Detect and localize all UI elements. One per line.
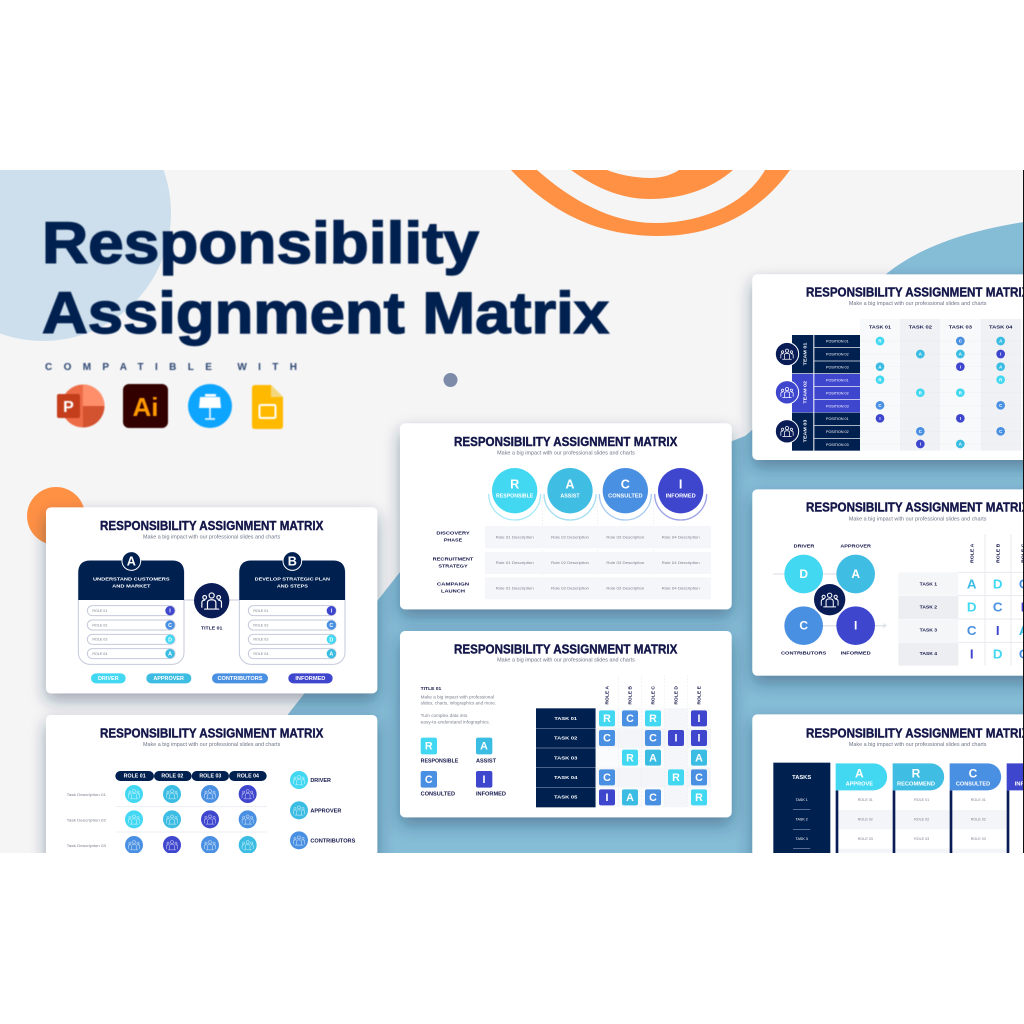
assignment dots: C (999, 403, 1002, 408)
assignment grid: C (626, 713, 634, 725)
panel subtitle: Make a big impact with our professional slides and charts (497, 658, 635, 664)
assignment grid: I (698, 713, 701, 725)
panel subtitle: Make a big impact with our professional slides and charts (497, 450, 635, 456)
description text: slides, charts, infographics and more. (421, 701, 496, 706)
phase rows: PHASE (444, 538, 463, 544)
RACI circles: R (510, 478, 519, 492)
DACI circles: C (799, 619, 808, 633)
phase rows: DISCOVERY (436, 531, 470, 537)
panel subtitle: Make a big impact with our professional slides and charts (143, 742, 281, 748)
RACI circles: I (679, 478, 682, 492)
assignment dots: I (920, 442, 921, 447)
card B: ROLE 03 (253, 638, 268, 642)
card B: ROLE 01 (253, 609, 268, 613)
card A: ROLE 04 (92, 652, 107, 656)
card B: D (329, 637, 333, 643)
DACI circles: INFORMED (841, 650, 871, 656)
icon: Illustrator (123, 384, 168, 428)
connector lines (184, 598, 239, 601)
label: title 01: TITLE 01 (201, 626, 223, 632)
assignment grid: R (672, 772, 680, 784)
task column: TASK 05 (554, 795, 578, 801)
RACI legend: R (425, 741, 433, 753)
icon: PowerPoint: P (63, 399, 74, 416)
phase rows: Role 04 Description (662, 534, 700, 539)
phase rows: Role 01 Description (496, 560, 534, 565)
panel title: RESPONSIBILITY ASSIGNMENT MATRIX (454, 641, 678, 656)
tasks column: TASK 1 (796, 798, 808, 802)
card A: ROLE 03 (92, 638, 107, 642)
table bands: ROLE 02 (971, 818, 986, 822)
team blocks (792, 335, 813, 451)
card A: UNDERSTAND CUSTOMERS (93, 576, 170, 582)
position rows: POSITION 03 (826, 443, 849, 447)
team blocks: TEAM 03 (802, 419, 808, 442)
icon: Google Slides (252, 385, 283, 429)
task rows: TASK 3 (920, 628, 937, 634)
white band top (0, 0, 1024, 170)
table bands (837, 790, 1008, 868)
letter matrix: ROLE B (996, 544, 1001, 563)
description text: TITLE 01 (421, 686, 442, 692)
role icon circles (125, 785, 257, 854)
DACI circles: DRIVER (794, 544, 815, 550)
letter matrix: A (967, 577, 977, 592)
letter matrix: C (993, 600, 1003, 615)
assignment dots: I (960, 416, 961, 421)
legend: APPROVER (310, 808, 341, 814)
RACI circles: CONSULTED (608, 494, 643, 500)
DACI circles (773, 544, 886, 656)
RACI legend: RESPONSIBLE (421, 758, 459, 764)
decorative blue blob (190, 222, 1024, 860)
card A: A (168, 652, 172, 658)
card B: DEVELOP STRATEGIC PLAN (255, 576, 330, 582)
task column: TASK 02 (554, 736, 578, 742)
letter matrix: D (993, 646, 1003, 661)
description text: Turn complex data into (421, 713, 468, 718)
task rows (898, 572, 958, 666)
RACI circles: INFORMED (666, 494, 696, 500)
phase rows (433, 526, 711, 599)
RACI legend: ASSIST (476, 758, 497, 764)
phase rows: CAMPAIGN (437, 582, 470, 588)
panel title: RESPONSIBILITY ASSIGNMENT MATRIX (100, 725, 324, 740)
assignment dots: I (1000, 352, 1001, 357)
assignment grid: C (695, 772, 703, 784)
RACI legend (421, 738, 506, 797)
RACI legend: INFORMED (476, 791, 506, 797)
card A (78, 552, 184, 664)
phase rows: Role 01 Description (496, 534, 534, 539)
task descriptions: Task Description 03 (67, 843, 107, 848)
phase rows: Role 01 Description (496, 586, 534, 591)
role column labels: ROLE B (628, 686, 633, 705)
DACI circles: APPROVER (840, 544, 871, 550)
assignment dots: C (919, 429, 922, 434)
table bands: ROLE 03 (914, 837, 929, 841)
assignment grid (596, 675, 711, 807)
description text: Make a big impact with professional (421, 694, 494, 699)
card B: I (331, 609, 333, 615)
tasks column: TASKS (792, 775, 812, 781)
table bands: ROLE 03 (971, 837, 986, 841)
task columns: TASK 04 (989, 324, 1013, 330)
team icons (775, 342, 799, 443)
main title: Responsibility (42, 211, 479, 276)
card A: AND MARKET (112, 583, 150, 589)
card A: ROLE 01 (92, 609, 107, 613)
task column: TASK 03 (554, 755, 578, 761)
panel subtitle: Make a big impact with our professional slides and charts (143, 534, 281, 540)
table bands: ROLE 01 (858, 798, 873, 802)
position rows: POSITION 03 (826, 404, 849, 408)
assignment dots: I (960, 364, 961, 369)
team blocks: TEAM 02 (802, 381, 808, 404)
card A: C (168, 623, 172, 629)
phase rows: LAUNCH (441, 589, 465, 595)
table bands: ROLE 01 (971, 798, 986, 802)
RACI circles: A (565, 478, 575, 492)
letter matrix: I (970, 646, 974, 661)
role column labels (605, 685, 702, 705)
phase rows: RECRUITMENT (433, 556, 473, 562)
card B: C (329, 623, 333, 629)
card B: A (329, 652, 333, 658)
letter matrix: D (993, 577, 1003, 592)
DACI circles: I (854, 619, 857, 633)
panel: task role table (752, 714, 1024, 901)
panel: DACI diagram (752, 489, 1024, 676)
panel: RACI phases (400, 423, 732, 609)
assignment dots: A (959, 442, 963, 447)
role column labels: ROLE E (697, 686, 702, 705)
task column: TASK 01 (554, 716, 577, 722)
DACI circles: A (851, 567, 860, 581)
assignment dots: R (919, 390, 923, 395)
assignment grid: R (626, 752, 634, 764)
team blocks: TEAM 01 (802, 342, 808, 365)
panel: two role cards (46, 507, 377, 693)
card B: ROLE 02 (253, 623, 268, 627)
column headers: R (912, 767, 921, 781)
assignment grid: I (675, 733, 678, 745)
role header pills: ROLE 04 (237, 774, 259, 780)
assignment grid: C (603, 772, 611, 784)
assignment grid: I (606, 792, 609, 804)
assignment dots: A (999, 364, 1003, 369)
assignment grid: A (695, 752, 703, 764)
column headers: CONSULTED (956, 782, 990, 788)
table bands: ROLE 02 (914, 818, 929, 822)
role column labels: ROLE C (651, 686, 656, 705)
task descriptions: Task Description 02 (67, 817, 107, 822)
assignment dots (876, 337, 1005, 448)
task columns: TASK 01 (869, 324, 891, 330)
assignment grid: C (603, 733, 611, 745)
assignment dots: I (879, 416, 881, 421)
phase rows: Role 04 Description (662, 560, 700, 565)
assignment grid: R (649, 713, 657, 725)
card A: A (127, 555, 136, 569)
RACI legend: CONSULTED (421, 791, 455, 797)
assignment dots: C (959, 339, 962, 344)
position rows: POSITION 02 (826, 430, 849, 434)
RACI legend: A (480, 741, 488, 753)
task descriptions (67, 792, 107, 848)
assignment dots: C (878, 403, 882, 408)
position rows: POSITION 01 (826, 417, 849, 421)
icon: PowerPoint (57, 384, 104, 428)
RACI circles: C (621, 478, 630, 492)
assignment grid: A (649, 752, 657, 764)
column headers (836, 763, 1024, 790)
letter matrix: C (967, 623, 977, 638)
DACI circles: D (799, 567, 808, 581)
panel: role icon matrix (46, 715, 377, 902)
assignment dots: C (999, 429, 1002, 434)
assignment dots: R (999, 377, 1003, 382)
panel: team position matrix (752, 274, 1024, 460)
legend pills (91, 673, 333, 683)
assignment grid: R (603, 713, 611, 725)
role header pills: ROLE 01 (124, 774, 146, 780)
task rows: TASK 2 (920, 604, 937, 610)
RACI circles: RESPONSIBLE (496, 494, 534, 500)
card B: ROLE 04 (253, 652, 268, 656)
assignment dots: A (999, 339, 1003, 344)
column headers: RECOMMEND (897, 782, 935, 788)
panel title: RESPONSIBILITY ASSIGNMENT MATRIX (100, 518, 324, 533)
icon: team in centre circle (194, 583, 229, 618)
assignment dots: R (878, 377, 882, 382)
task rows: TASK 1 (920, 581, 937, 587)
phase rows: Role 02 Description (551, 534, 589, 539)
description text (421, 686, 496, 724)
position rows: POSITION 01 (826, 339, 849, 343)
DACI circles: CONTRIBUTORS (781, 650, 827, 656)
panel subtitle: Make a big impact with our professional slides and charts (849, 742, 987, 748)
position rows: POSITION 03 (826, 366, 849, 370)
role header pills (115, 771, 267, 781)
panel title: RESPONSIBILITY ASSIGNMENT MATRIX (454, 434, 678, 449)
legend: CONTRIBUTORS (310, 838, 356, 844)
phase rows: Role 03 Description (606, 586, 644, 591)
panel subtitle: Make a big impact with our professional slides and charts (849, 516, 987, 522)
position rows: POSITION 02 (826, 391, 849, 395)
card A: ROLE 02 (92, 623, 107, 627)
task descriptions: Task Description 01 (67, 792, 107, 797)
page background (0, 170, 1024, 854)
column headers: APPROVE (846, 782, 873, 788)
legend pills: CONTRIBUTORS (217, 676, 263, 682)
description text: easy-to-understand infographics. (421, 719, 490, 724)
role header pills: ROLE 03 (199, 774, 221, 780)
RACI circles: ASSIST (560, 494, 580, 500)
task column: TASK 04 (554, 775, 578, 781)
legend: DRIVER (310, 778, 331, 784)
icon: Illustrator: Ai (132, 392, 158, 422)
table bands: ROLE 02 (858, 818, 873, 822)
legend pills: APPROVER (153, 676, 184, 682)
panel subtitle: Make a big impact with our professional slides and charts (849, 301, 987, 307)
letter matrix: D (967, 600, 977, 615)
RACI circles (489, 468, 707, 520)
decorative light blue circle (0, 85, 171, 341)
RACI legend: I (483, 774, 486, 786)
position rows: POSITION 02 (826, 353, 849, 357)
decorative orange rings (511, 170, 790, 236)
card B (239, 552, 345, 664)
assignment grid: I (698, 733, 701, 745)
card B: AND STEPS (277, 583, 309, 589)
assignment dots: A (878, 364, 882, 369)
decorative grey dot (444, 373, 458, 387)
role header pills: ROLE 02 (161, 774, 183, 780)
assignment dots: A (959, 352, 963, 357)
assignment grid: A (626, 792, 634, 804)
table bands: ROLE 03 (858, 837, 873, 841)
main title: Assignment Matrix (42, 281, 609, 346)
phase rows: Role 03 Description (606, 534, 644, 539)
column headers: C (969, 767, 978, 781)
task column (536, 708, 596, 807)
compatible with label: COMPATIBLE WITH (45, 362, 297, 373)
tasks column: TASK 3 (796, 837, 808, 841)
assignment grid: C (649, 792, 657, 804)
task columns: TASK 03 (949, 324, 972, 330)
column headers: A (855, 767, 864, 781)
table bands: ROLE 01 (914, 798, 929, 802)
panel: task role grid (400, 631, 732, 817)
legend (290, 771, 356, 849)
role column labels: ROLE D (674, 686, 679, 705)
tasks column (773, 763, 830, 863)
assignment dots: R (959, 390, 963, 395)
letter matrix: ROLE A (970, 543, 975, 563)
letter matrix: I (996, 623, 1000, 638)
position rows (814, 335, 860, 451)
phase rows: Role 02 Description (551, 560, 589, 565)
right edge line (1023, 170, 1024, 853)
assignment dots: R (878, 339, 882, 344)
phase rows: Role 03 Description (606, 560, 644, 565)
phase rows: Role 04 Description (662, 586, 700, 591)
task rows: TASK 4 (920, 651, 937, 657)
legend pills: DRIVER (98, 676, 119, 682)
legend pills: INFORMED (295, 676, 325, 682)
icon: Keynote (188, 384, 232, 428)
RACI legend: C (425, 774, 433, 786)
assignment grid: C (649, 733, 657, 745)
role column labels: ROLE A (605, 685, 610, 705)
phase rows: STRATEGY (438, 563, 468, 569)
decorative orange circle (27, 487, 85, 545)
tasks column: TASK 2 (796, 818, 808, 822)
main title (42, 211, 609, 346)
card B: B (288, 555, 297, 569)
white band bottom (0, 853, 1024, 1024)
assignment grid: R (695, 792, 703, 804)
phase rows: Role 02 Description (551, 586, 589, 591)
position rows: POSITION 01 (826, 378, 849, 382)
card A: D (168, 637, 172, 643)
task columns: TASK 02 (909, 324, 932, 330)
card A: I (169, 609, 171, 615)
task columns (860, 319, 1024, 451)
assignment dots: A (919, 352, 923, 357)
letter matrix (958, 534, 1024, 666)
